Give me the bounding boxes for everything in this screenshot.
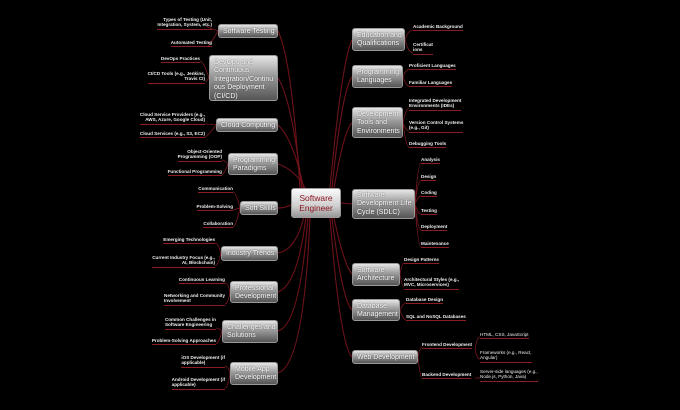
leaf: Networking: [164, 293, 225, 306]
leaf: Deployment: Deployment: [421, 224, 447, 229]
leaf: Design: Design: [421, 174, 436, 179]
leaf: Problem-Solving: [196, 204, 233, 211]
leaf: Frameworks: [480, 350, 532, 363]
leaf: Collaboration: Collaboration: [203, 221, 233, 226]
node: Programming Languages: Languages: [357, 77, 392, 84]
leaf: OOP: Object-Oriented: [187, 149, 222, 154]
node: Programming Paradigms: [228, 153, 278, 175]
node: Programming Paradigms: Programming: [233, 156, 275, 164]
center node: Software Engineer: Engineer: [299, 203, 333, 213]
leaf: Certifications: [413, 42, 433, 55]
node: DevOps CI/CD: (CI/CD): [214, 93, 238, 100]
leaf: Coding: Coding: [421, 190, 437, 195]
node: Industry Trends: [221, 246, 278, 261]
leaf: Debugging Tools: Debugging Tools: [409, 141, 446, 146]
leaf: Common Challenges: Software Engineering: [165, 322, 212, 327]
leaf: Common Challenges: Common Challenges in: [165, 317, 216, 322]
leaf: Problem-Solving: Problem-Solving: [196, 204, 233, 209]
leaf: IDEs: [409, 98, 461, 111]
leaf: Emerging Technologies: Emerging Technologies: [163, 237, 215, 242]
leaf: Types of Testing: [157, 17, 212, 30]
leaf: Familiar Languages: [409, 80, 452, 87]
leaf: Android Development: applicable): [172, 382, 196, 387]
node: SDLC: Development Life: [357, 200, 411, 207]
leaf: Cloud Services: [140, 131, 205, 138]
leaf: Current Industry Focus: [152, 255, 215, 268]
leaf: Types of Testing: Integration, System, etc.): [157, 22, 212, 27]
leaf: Deployment: [421, 224, 447, 231]
node: Challenges and Solutions: Challenges and: [227, 324, 276, 331]
leaf: Backend Development: [422, 372, 471, 379]
node: Development Tools: Tools and: [357, 119, 387, 126]
node: SDLC: [352, 189, 415, 219]
leaf: Testing: [421, 208, 437, 215]
node: Database Management: Management: [357, 311, 398, 318]
leaf: iOS Development: applicable): [181, 360, 205, 365]
leaf: Server-side languages: Node.js, Python, Java): [480, 374, 526, 379]
leaf: OOP: Programming (OOP): [178, 154, 222, 159]
leaf: Android Development: Android Development (if: [172, 377, 225, 382]
node: Software Testing: Software Testing: [223, 28, 275, 34]
leaf: Design Patterns: [404, 257, 439, 264]
leaf: Emerging Technologies: [163, 237, 215, 244]
node: DevOps CI/CD: Integration/Continu: [214, 76, 273, 83]
node: Programming Languages: Programming: [357, 69, 399, 76]
leaf: Backend Development: Backend Development: [422, 372, 471, 377]
node: Software Architecture: Architecture: [357, 275, 394, 282]
node: Mobile App Development: Development: [235, 374, 276, 381]
leaf: Common Challenges: [165, 317, 216, 330]
leaf: Cloud Service Providers: AWS, Azure, Google Cloud): [145, 117, 205, 122]
node: Programming Languages: [352, 65, 403, 88]
node: SDLC: Software: [357, 192, 385, 199]
node: Professional Development: [230, 281, 278, 303]
node: Education and Qualifications: [352, 28, 405, 51]
center node: Software Engineer: Software: [299, 193, 333, 203]
leaf: Proficient Languages: Proficient Languages: [409, 63, 456, 68]
leaf: CI/CD Tools: Travis CI): [184, 76, 205, 81]
leaf: Coding: [421, 190, 437, 197]
leaf: Academic Background: [413, 24, 463, 31]
leaf: Analysis: [421, 157, 440, 164]
node: DevOps CI/CD: DevOps and: [214, 59, 253, 66]
node: Challenges and Solutions: [222, 320, 278, 343]
leaf: Current Industry Focus: Current Industry Focus (e.g.,: [152, 255, 215, 260]
node: Development Tools: [352, 107, 403, 138]
node: SDLC: Cycle (SDLC): [357, 209, 400, 216]
node: Mobile App Development: [230, 362, 278, 385]
node: Web Development: [352, 350, 418, 364]
node: DevOps CI/CD: [209, 55, 278, 101]
leaf: DevOps Practices: [161, 56, 200, 63]
leaf: Problem-Solving Approaches: Problem-Solving Approaches: [152, 338, 216, 343]
leaf: Architectural Styles: MVC, Microservices): [404, 282, 449, 287]
leaf: Proficient Languages: [409, 63, 456, 70]
node: Mobile App Development: Mobile App: [235, 366, 270, 373]
leaf: Maintenance: [421, 241, 449, 248]
leaf: Communication: Communication: [198, 186, 233, 191]
leaf: Collaboration: [203, 221, 233, 228]
node: Software Testing: [218, 24, 278, 38]
leaf: Communication: [198, 186, 233, 193]
leaf: Server-side languages: Server-side languages (e.g.,: [480, 369, 538, 374]
node: Cloud Computing: [216, 118, 278, 132]
leaf: Testing: Testing: [421, 208, 437, 213]
node: Development Tools: Environments: [357, 128, 400, 135]
leaf: Frontend Development: [422, 342, 472, 349]
leaf: Design: [421, 174, 436, 181]
node: Industry Trends: Industry Trends: [226, 250, 274, 257]
leaf: Android Development: [172, 377, 225, 390]
leaf: Problem-Solving Approaches: [152, 338, 216, 345]
node: Challenges and Solutions: Solutions: [227, 332, 256, 339]
leaf: Maintenance: Maintenance: [421, 241, 449, 246]
leaf: CI/CD Tools: [148, 71, 205, 84]
node: Software Architecture: Software: [357, 267, 385, 274]
leaf: Cloud Services: Cloud Services (e.g., S3, EC2): [140, 131, 205, 136]
leaf: Frameworks: Angular): [480, 355, 497, 360]
leaf: Certifications: Certificat: [413, 42, 433, 47]
node: Soft Skills: Soft Skills: [245, 204, 276, 212]
leaf: Debugging Tools: [409, 141, 446, 148]
leaf: SQL and NoSQL: SQL and NoSQL Databases: [406, 314, 466, 319]
leaf: OOP: [178, 149, 222, 162]
node: Professional Development: Professional: [235, 284, 274, 292]
leaf: Design Patterns: Design Patterns: [404, 257, 439, 262]
center node: Software Engineer: [291, 188, 341, 218]
leaf: Cloud Service Providers: Cloud Service Providers (e.g.,: [140, 112, 205, 117]
node: Web Development: Web Development: [357, 354, 414, 360]
leaf: Architectural Styles: Architectural Styles (e.g.,: [404, 277, 459, 282]
leaf: Cloud Service Providers: [140, 112, 205, 125]
leaf: Networking: Networking and Community: [164, 293, 225, 298]
leaf: Functional Programming: [168, 169, 222, 176]
leaf: SQL and NoSQL: [406, 314, 466, 321]
node: Soft Skills: [240, 201, 278, 215]
leaf: Version Control: [409, 120, 463, 133]
leaf: Academic Background: Academic Background: [413, 24, 463, 29]
leaf: Version Control: (e.g., Git): [409, 125, 429, 130]
node: Professional Development: Development: [235, 293, 276, 300]
leaf: Continuous Learning: Continuous Learning: [179, 277, 225, 282]
node: Programming Paradigms: Paradigms: [233, 165, 266, 172]
leaf: Types of Testing: Types of Testing (Unit,: [163, 17, 212, 22]
node: DevOps CI/CD: Continuous: [214, 67, 249, 74]
leaf: Frontend Development: Frontend Development: [422, 342, 472, 347]
leaf: Frameworks: Frameworks (e.g., React,: [480, 350, 532, 355]
node: Education and Qualifications: Education and: [357, 32, 402, 39]
node: Software Architecture: [352, 263, 400, 286]
leaf: IDEs: Integrated Development: [409, 98, 461, 103]
node: Database Management: Database: [357, 302, 387, 310]
leaf: Continuous Learning: [179, 277, 225, 284]
leaf: iOS Development: [181, 355, 225, 368]
leaf: HTML CSS JS: [480, 332, 529, 339]
leaf: Networking: Involvement: [164, 298, 191, 303]
node: Database Management: [352, 299, 400, 321]
node: DevOps CI/CD: ous Deployment: [214, 84, 265, 91]
leaf: CI/CD Tools: CI/CD Tools (e.g., Jenkins,: [148, 71, 205, 76]
leaf: Server-side languages: [480, 369, 538, 382]
leaf: HTML CSS JS: HTML, CSS, JavaScript: [480, 332, 529, 337]
leaf: Architectural Styles: [404, 277, 459, 290]
leaf: Current Industry Focus: AI, Blockchain): [182, 260, 215, 265]
leaf: Database Design: [406, 297, 443, 304]
leaf: Version Control: Version Control Systems: [409, 120, 463, 125]
leaf: Familiar Languages: Familiar Languages: [409, 80, 452, 85]
leaf: Database Design: Database Design: [406, 297, 443, 302]
leaf: Certifications: ions: [413, 47, 422, 52]
leaf: DevOps Practices: DevOps Practices: [161, 56, 200, 61]
leaf: Functional Programming: Functional Programming: [168, 169, 222, 174]
leaf: IDEs: Environments (IDEs): [409, 103, 454, 108]
leaf: Automated Testing: Automated Testing: [171, 40, 212, 45]
leaf: Analysis: Analysis: [421, 157, 440, 162]
leaf: Automated Testing: [171, 40, 212, 47]
node: Cloud Computing: Cloud Computing: [221, 122, 275, 128]
leaf: iOS Development: iOS Development (if: [181, 355, 225, 360]
node: Development Tools: Development: [357, 111, 398, 118]
node: Education and Qualifications: Qualifications: [357, 40, 399, 47]
